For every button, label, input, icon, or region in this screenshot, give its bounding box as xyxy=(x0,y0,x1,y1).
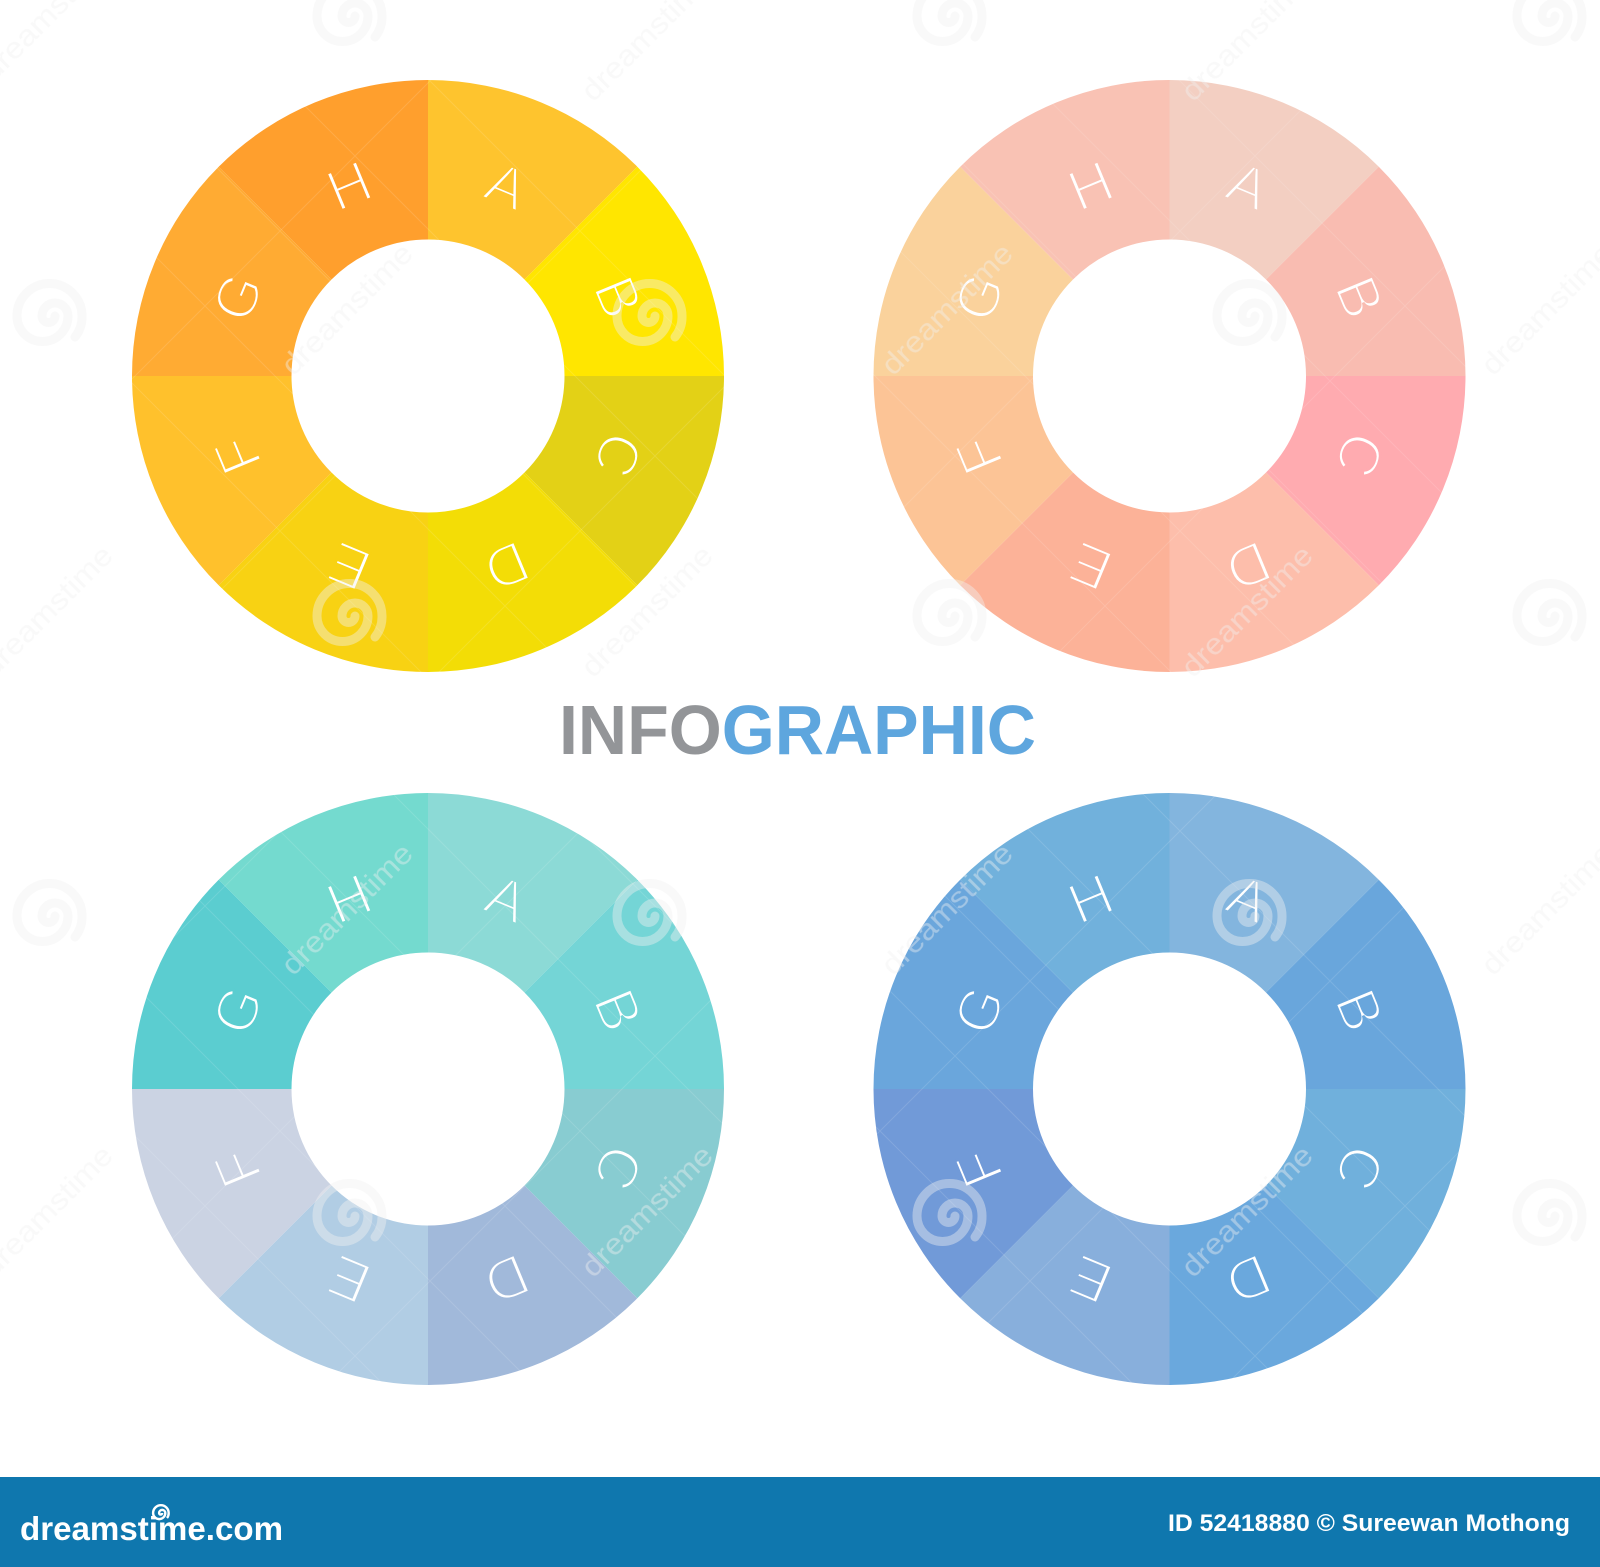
segment D: D xyxy=(475,528,538,604)
segment F xyxy=(874,1089,1073,1298)
segment E xyxy=(219,1186,428,1385)
segment A xyxy=(1170,793,1379,992)
segment H xyxy=(960,793,1170,992)
image credit: ID 52418880 © Sureewan Mothong xyxy=(1168,1510,1570,1537)
segment H: H xyxy=(1059,861,1123,937)
segment H: H xyxy=(318,148,381,224)
segment D xyxy=(1170,472,1379,672)
segment E xyxy=(219,472,428,672)
segment E: E xyxy=(319,528,380,603)
watermark wordmarks: dreamstime xyxy=(275,837,420,982)
segment B xyxy=(1266,880,1466,1089)
segment E xyxy=(960,472,1170,672)
segment D: D xyxy=(475,1241,538,1317)
watermark spirals xyxy=(17,0,1582,1242)
segment F: F xyxy=(201,426,275,483)
segment F xyxy=(132,376,332,585)
segment C xyxy=(1266,1089,1466,1298)
segment E: E xyxy=(1061,528,1121,603)
dreamstime logo: dreamstime.com xyxy=(20,1510,283,1547)
segment E: E xyxy=(1061,1241,1121,1316)
wheel: pastel pink and peach xyxy=(874,80,1466,672)
segment A: A xyxy=(476,862,537,937)
segment C: C xyxy=(580,423,656,486)
segment C: C xyxy=(1321,423,1397,486)
segment F: F xyxy=(201,1139,275,1196)
segment H: H xyxy=(318,861,381,937)
segment G xyxy=(874,880,1073,1089)
segment G: G xyxy=(200,977,277,1044)
segment B xyxy=(1266,167,1466,376)
segment B: B xyxy=(580,267,655,328)
segment G xyxy=(132,880,332,1089)
watermark wordmarks: dreamstime xyxy=(875,837,1020,982)
segment D xyxy=(428,1186,637,1385)
segment A xyxy=(428,80,637,280)
segment A: A xyxy=(476,149,537,224)
wheel: blue xyxy=(874,793,1466,1385)
segment H xyxy=(219,793,428,992)
watermark wordmarks: dreamstime xyxy=(875,237,1020,382)
segment B xyxy=(524,880,724,1089)
segment F xyxy=(874,376,1073,585)
segment G xyxy=(132,167,332,376)
segment D xyxy=(1170,1186,1379,1385)
segment F: F xyxy=(943,1139,1016,1196)
segment B: B xyxy=(1322,980,1397,1041)
segment D: D xyxy=(1216,528,1280,604)
segment B: B xyxy=(1322,267,1397,328)
segment C xyxy=(524,1089,724,1298)
title: INFOGRAPHIC xyxy=(559,691,1036,769)
segment G: G xyxy=(941,977,1018,1044)
segment E xyxy=(960,1186,1170,1385)
segment C: C xyxy=(580,1136,656,1199)
segment H xyxy=(219,80,428,280)
segment A xyxy=(1170,80,1379,280)
segment E: E xyxy=(319,1241,380,1316)
segment F xyxy=(132,1089,332,1298)
segment A xyxy=(428,793,637,992)
segment C xyxy=(524,376,724,585)
segment B: B xyxy=(580,980,655,1041)
segment H: H xyxy=(1059,148,1123,224)
segment C: C xyxy=(1321,1136,1397,1199)
segment G: G xyxy=(200,264,277,331)
segment C xyxy=(1266,376,1466,585)
wheel: teal and pale blue xyxy=(132,793,724,1385)
segment G: G xyxy=(941,264,1018,331)
segment A: A xyxy=(1218,149,1279,224)
footer bar xyxy=(0,1477,1600,1567)
segment H xyxy=(960,80,1170,280)
watermark wordmarks: dreamstime xyxy=(1175,539,1320,684)
watermark wordmarks: dreamstime xyxy=(575,1139,720,1284)
watermark wordmarks: dreamstime xyxy=(575,539,720,684)
segment D xyxy=(428,472,637,672)
segment F: F xyxy=(943,426,1016,483)
wheel: warm yellow and orange xyxy=(132,80,724,672)
segment B xyxy=(524,167,724,376)
segment D: D xyxy=(1216,1241,1280,1317)
segment G xyxy=(874,167,1073,376)
watermark wordmarks: dreamstime xyxy=(1175,1139,1320,1284)
watermark wordmarks: dreamstime xyxy=(275,237,420,382)
segment A: A xyxy=(1218,862,1279,937)
